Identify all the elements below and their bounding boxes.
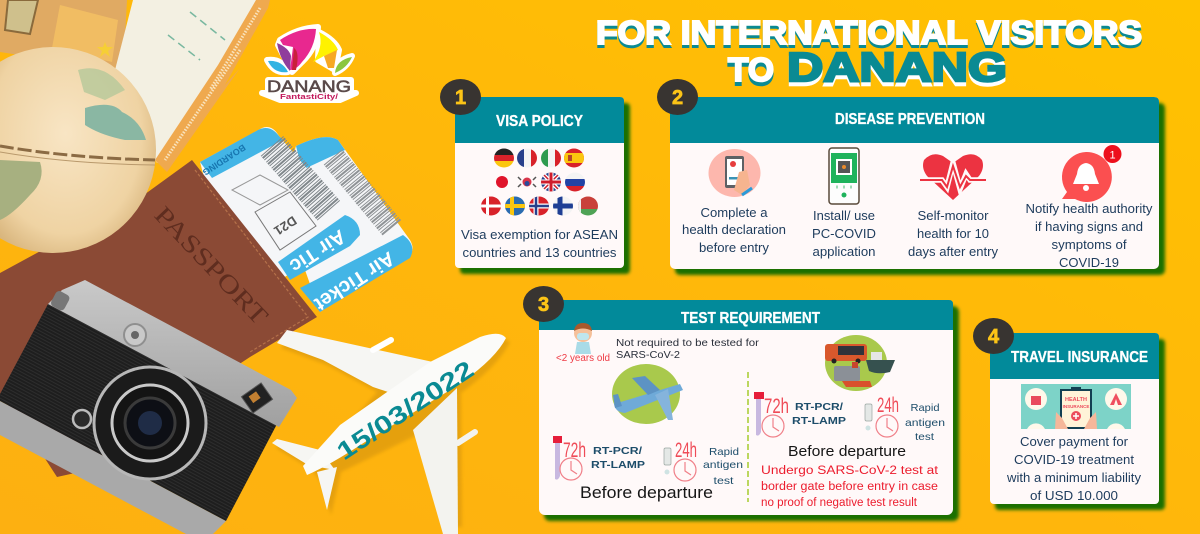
- icon: airplane on green circle: [612, 364, 683, 424]
- RT-PCR label: RT-PCR/: [593, 445, 642, 457]
- rapid test label: [703, 446, 743, 487]
- RT-PCR label: RT-LAMP: [792, 415, 846, 427]
- health insurance illustration: [1021, 384, 1131, 429]
- number badge 3: [523, 286, 564, 322]
- border test note: no proof of negative test result: [761, 497, 918, 509]
- border test note: [761, 465, 939, 509]
- step text columns: Install/ use: [813, 209, 875, 223]
- rapid test label: antigen: [703, 459, 743, 471]
- step text columns: health for 10: [917, 227, 989, 241]
- passport word: PASSPORT: [149, 202, 273, 330]
- front ticket: [200, 127, 360, 280]
- 72h: 72h: [563, 439, 586, 462]
- back ticket: [280, 137, 413, 315]
- back ticket: Air Ticket: [310, 247, 398, 315]
- icon: bus, train and ship on green circle: [825, 335, 895, 391]
- step text columns: days after entry: [908, 245, 999, 259]
- health insurance illustration: INSURANCE: [1063, 404, 1089, 409]
- step text columns: Self-monitor: [918, 209, 988, 223]
- flags: [481, 148, 598, 216]
- before departure: Before departure: [580, 483, 713, 502]
- right test options: [754, 392, 945, 460]
- photo collage: travel items: [0, 0, 510, 534]
- border test note: Undergo SARS-CoV-2 test at: [761, 465, 939, 477]
- RT-PCR label: [591, 445, 645, 471]
- insurance text: Cover payment for: [1020, 435, 1128, 449]
- rapid test label: antigen: [905, 417, 945, 429]
- front ticket: D21: [271, 213, 300, 239]
- panel 4: travel insurance: [973, 318, 1165, 510]
- heading: DISEASE PREVENTION: [835, 111, 985, 128]
- step text columns: [682, 202, 1153, 270]
- no test note: Not required to be tested for: [616, 338, 760, 349]
- 24h: 24h: [675, 439, 697, 462]
- globe: [0, 47, 156, 253]
- icon: heart pulse: [920, 154, 986, 200]
- number badge 2: 2: [672, 87, 683, 109]
- antigen device: [865, 404, 872, 430]
- before departure: Before departure: [788, 443, 906, 460]
- icon: notification bell: [1062, 145, 1122, 202]
- number badge 3: 3: [538, 294, 549, 316]
- border test note: border gate before entry in case: [761, 481, 938, 493]
- insurance text: of USD 10.000: [1030, 489, 1118, 503]
- title line 2: Danang: DANANG: [787, 48, 1007, 94]
- logo: Danang FantastiCity: [262, 27, 356, 101]
- panel 1: visa policy: [440, 79, 630, 274]
- rapid test label: [905, 402, 945, 443]
- title line 2: to: TO: [728, 55, 774, 92]
- RT-PCR label: RT-PCR/: [795, 401, 843, 413]
- rapid test label: Rapid: [910, 402, 940, 414]
- icon: masked child: [574, 323, 592, 354]
- visa text: [461, 228, 618, 260]
- rapid test label: test: [714, 475, 734, 487]
- date on plane: 15/03/2022: [332, 355, 479, 466]
- rapid test label: Rapid: [709, 446, 739, 458]
- panel 2: disease prevention: [657, 79, 1165, 275]
- 24h: 24h: [877, 394, 899, 417]
- clock: [876, 415, 898, 437]
- visa text: countries and 13 countries: [462, 246, 616, 260]
- logo wordmark: DANANG: [267, 77, 351, 96]
- passport cover: [0, 160, 317, 477]
- insurance text: COVID-19 treatment: [1014, 453, 1135, 467]
- test tube: [754, 392, 764, 436]
- rapid test label: test: [915, 431, 934, 443]
- title: [596, 14, 1142, 94]
- heading: TEST REQUIREMENT: [681, 310, 820, 327]
- number badge 1: 1: [455, 87, 466, 109]
- left test options: [553, 436, 743, 502]
- title line 1: FOR INTERNATIONAL VISITORS: [596, 14, 1142, 51]
- panel 3: test requirement: [523, 286, 959, 521]
- step text columns: COVID-19: [1059, 256, 1119, 270]
- title line 2: to: TO: [728, 51, 774, 88]
- clock: [674, 459, 696, 481]
- logo outline: [262, 27, 356, 100]
- boarding tickets: [200, 127, 413, 315]
- step text columns: before entry: [699, 241, 770, 255]
- no test note: [616, 338, 760, 361]
- insurance text: with a minimum liability: [1006, 471, 1142, 485]
- step text columns: Notify health authority: [1026, 202, 1153, 216]
- health insurance illustration: HEALTH: [1065, 397, 1087, 403]
- clock: [762, 415, 784, 437]
- title line 2: Danang: DANANG: [787, 44, 1007, 90]
- banknotes: [0, 0, 270, 172]
- insurance text: [1006, 435, 1142, 503]
- visa text: Visa exemption for ASEAN: [461, 228, 618, 242]
- antigen device: [664, 448, 671, 474]
- title line 1: FOR INTERNATIONAL VISITORS: [596, 17, 1142, 54]
- clock: [560, 458, 582, 480]
- step text columns: application: [812, 245, 876, 259]
- divider: [747, 372, 749, 502]
- icon: PC-COVID phone: [829, 148, 859, 204]
- number badge 2: [657, 79, 698, 115]
- front ticket: Air Tic: [285, 225, 349, 277]
- heading: VISA POLICY: [496, 113, 584, 130]
- icon: notification bell: 1: [1109, 150, 1116, 162]
- age label: <2 years old: [556, 353, 610, 364]
- heading: TRAVEL INSURANCE: [1011, 349, 1148, 366]
- icon: health declaration phone: [708, 149, 760, 197]
- logo petals: [268, 29, 352, 73]
- RT-PCR label: RT-LAMP: [591, 459, 645, 471]
- step text columns: Complete a: [700, 206, 768, 220]
- step text columns: PC-COVID: [812, 227, 876, 241]
- step text columns: if having signs and: [1035, 220, 1143, 234]
- number badge 1: [440, 79, 481, 115]
- step text columns: symptoms of: [1052, 238, 1127, 252]
- 72h: 72h: [764, 395, 789, 418]
- front ticket: BOARDING: [201, 142, 247, 177]
- test tube: [553, 436, 562, 480]
- number badge 4: 4: [988, 326, 1000, 348]
- step text columns: health declaration: [682, 223, 786, 237]
- logo tagline: FantastiCity/: [280, 92, 339, 101]
- camera: [0, 280, 297, 534]
- toy airplane: [272, 330, 510, 534]
- no test note: SARS-CoV-2: [616, 350, 680, 361]
- RT-PCR label: [792, 401, 846, 427]
- number badge 4: [973, 318, 1014, 354]
